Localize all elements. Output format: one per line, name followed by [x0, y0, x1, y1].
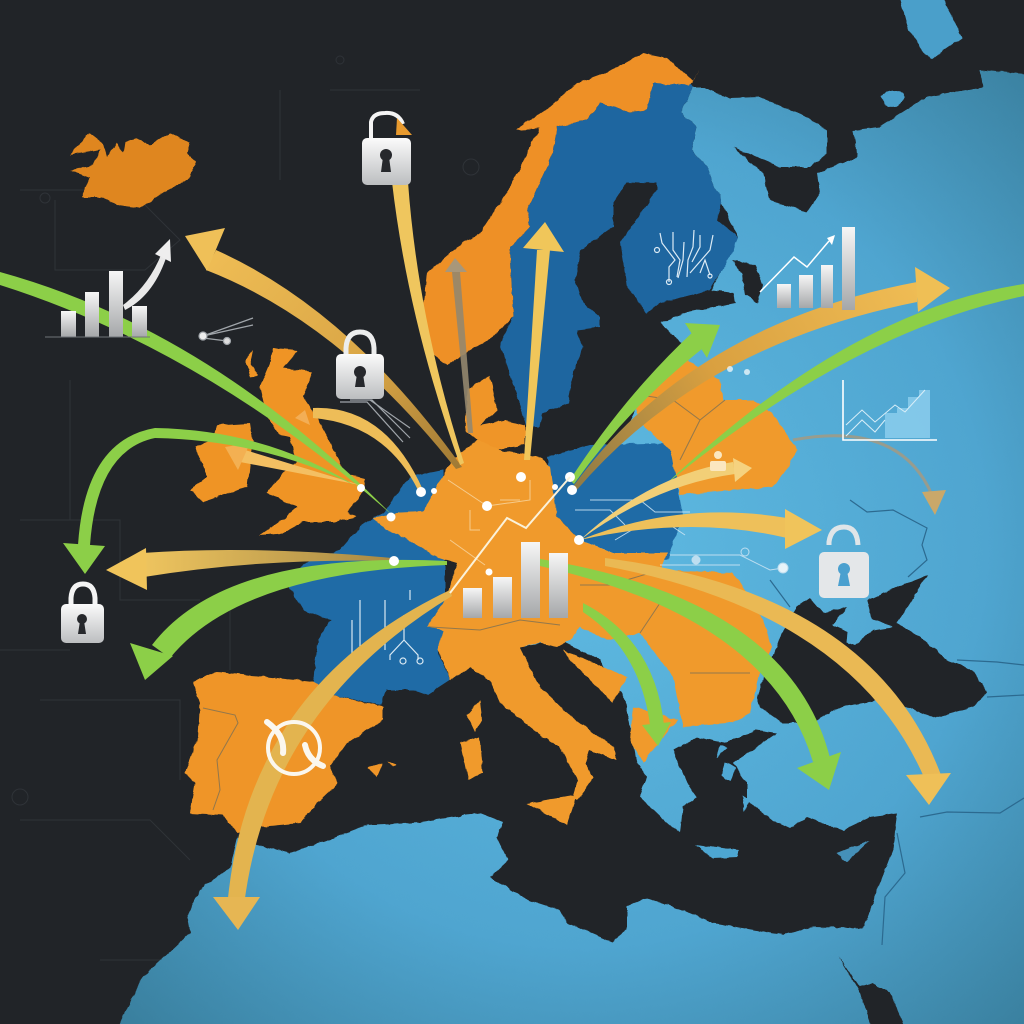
norway — [423, 53, 700, 365]
circuit lines: germany — [448, 480, 530, 565]
sweden and finland — [500, 82, 738, 427]
ireland — [190, 423, 253, 502]
circuit lines: france — [352, 590, 423, 664]
arrow: grey to south east — [793, 436, 946, 515]
greece north — [630, 707, 677, 763]
lock: north — [362, 113, 412, 185]
lock: belarus small — [710, 451, 726, 471]
balkans — [563, 650, 627, 703]
estonian islands — [733, 260, 763, 303]
corsica — [467, 700, 482, 732]
balearic islands — [368, 761, 396, 777]
eastern line chart — [843, 380, 937, 440]
arrow: yellow to east — [572, 267, 950, 492]
arrow: small yellow to belarus — [580, 458, 752, 540]
belarus and baltics — [633, 360, 797, 495]
spain and portugal — [185, 672, 383, 832]
circuit cluster: north sea — [199, 318, 410, 442]
arrow: yellow north — [523, 222, 564, 460]
sinai — [838, 955, 915, 1024]
crete gap — [695, 845, 740, 858]
arrow: yellow on ireland — [225, 443, 360, 485]
small lake — [880, 90, 905, 106]
arrow: green to atlantic — [130, 560, 447, 680]
arrow: green to south east — [540, 559, 841, 790]
cyprus gap — [837, 840, 870, 862]
arrow: green curving to south west — [63, 428, 362, 574]
circuit lines: finland — [654, 230, 713, 284]
poland — [547, 443, 683, 560]
northern lake — [895, 0, 962, 60]
network nodes — [357, 366, 750, 576]
icon: circular symbol over spain — [267, 722, 323, 774]
arrow: yellow to south east — [605, 558, 951, 805]
iceland — [70, 133, 197, 208]
central bar chart — [450, 477, 570, 618]
arrow: yellow up to lock — [392, 182, 464, 465]
north east bar chart — [760, 227, 855, 310]
arrow: yellow to morocco — [213, 590, 452, 930]
france and benelux — [285, 470, 450, 705]
arrow: yellow west — [106, 548, 392, 590]
lock: east — [819, 527, 869, 598]
lock: west — [61, 584, 104, 643]
arrow: green long from east — [665, 284, 1024, 485]
scottish isles — [245, 350, 258, 378]
country borders — [203, 395, 750, 810]
north west bar chart — [45, 239, 171, 337]
denmark — [465, 375, 525, 450]
arrow: yellow to east lock — [580, 509, 822, 549]
arrow: yellow to north west — [185, 228, 462, 469]
arrow: grey north — [445, 258, 473, 433]
sardinia — [460, 737, 483, 780]
black sea — [757, 575, 987, 723]
eastern country borders — [770, 500, 1024, 945]
arrow: yellow over britain — [295, 408, 423, 490]
great britain — [260, 348, 365, 535]
lock: north sea — [336, 332, 384, 399]
sicily — [527, 795, 577, 825]
arrow: green from the west — [0, 272, 392, 515]
mediterranean lands and north africa — [237, 640, 897, 942]
aegean gaps — [716, 745, 750, 812]
kola peninsula coast — [733, 130, 857, 212]
central europe and italy — [373, 440, 772, 800]
arrow: green to north east — [570, 323, 720, 484]
arrow: green to greece — [583, 603, 671, 746]
circuit lines: poland and east — [575, 500, 788, 573]
